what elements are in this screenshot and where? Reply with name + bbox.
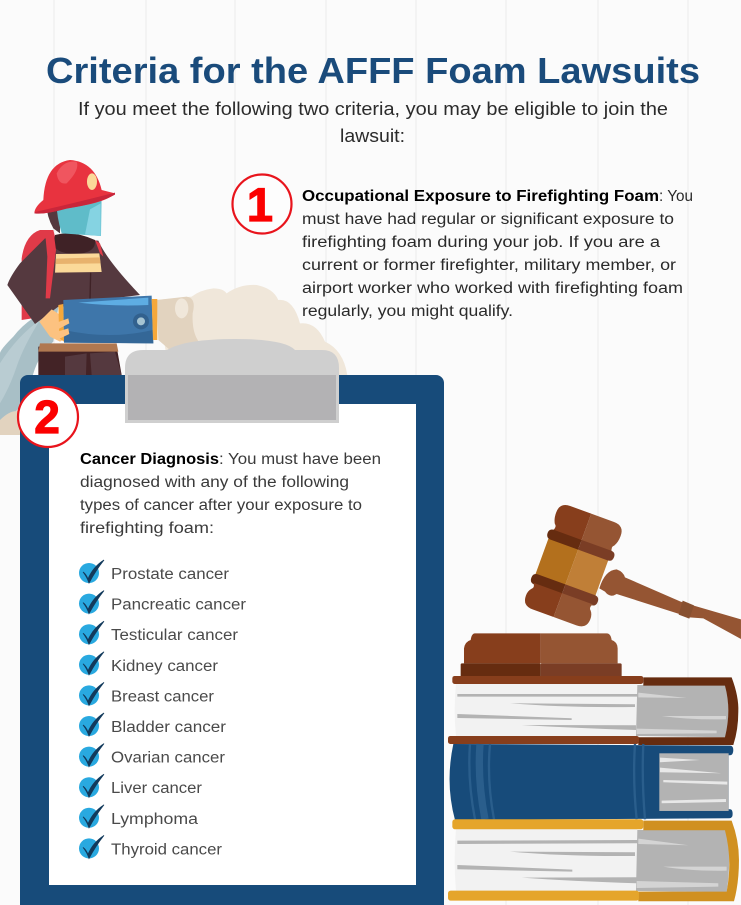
subtitle xyxy=(78,99,668,146)
subtitle: lawsuit: xyxy=(340,126,405,146)
panel: clipboard xyxy=(20,339,444,905)
item: breast cancer xyxy=(79,682,214,705)
hose xyxy=(0,307,58,427)
item: liver cancer xyxy=(79,774,202,797)
item: thyroid cancer xyxy=(79,835,222,858)
text block: cancer diagnosis xyxy=(80,451,381,537)
clipboard clip xyxy=(125,339,339,423)
badge: number 1 xyxy=(232,174,292,234)
jacket reflective band xyxy=(55,253,102,273)
text block: cancer diagnosis: : You must have been xyxy=(219,451,381,468)
text block: cancer diagnosis: types of cancer after your exposure to xyxy=(80,497,362,514)
item: prostate cancer: Prostate cancer xyxy=(111,566,229,583)
text block: cancer diagnosis: diagnosed with any of the following xyxy=(80,474,349,491)
item: lymphoma xyxy=(79,805,198,828)
item: kidney cancer: Kidney cancer xyxy=(111,658,218,675)
helmet and visor xyxy=(47,200,60,233)
item: testicular cancer: Testicular cancer xyxy=(111,627,238,644)
backpack xyxy=(22,230,58,320)
item: breast cancer: Breast cancer xyxy=(111,688,214,705)
text block: occupational exposure: airport worker who worked with firefighting foam xyxy=(302,280,683,297)
text block: cancer diagnosis: firefighting foam: xyxy=(80,520,214,537)
title: Criteria for the AFFF Foam Lawsuits xyxy=(46,50,700,91)
gavel and books illustration xyxy=(448,502,741,901)
firefighter illustration xyxy=(0,160,157,435)
item: ovarian cancer: Ovarian cancer xyxy=(111,750,225,767)
gavel handle xyxy=(599,569,741,639)
book: brown xyxy=(448,676,738,745)
subtitle: If you meet the following two criteria, you may be eligible to join the xyxy=(78,99,668,119)
item: lymphoma: Lymphoma xyxy=(111,811,198,828)
text block: cancer diagnosis: Cancer Diagnosis xyxy=(80,451,219,468)
item: prostate cancer xyxy=(79,560,229,583)
jacket xyxy=(7,238,140,324)
gavel sound block xyxy=(464,633,541,663)
item: kidney cancer xyxy=(79,652,218,675)
text block: occupational exposure: must have had regular or significant exposure to xyxy=(302,211,674,228)
item: ovarian cancer xyxy=(79,744,225,767)
item: testicular cancer xyxy=(79,621,238,644)
text block: occupational exposure: regularly, you might qualify. xyxy=(302,303,513,320)
item: pancreatic cancer xyxy=(79,591,246,614)
text block: occupational exposure xyxy=(302,188,693,320)
foam spray xyxy=(157,285,347,375)
hand xyxy=(39,309,69,342)
text block: occupational exposure: firefighting foam during your job. If you are a xyxy=(302,234,660,251)
badge: number 1: 1 xyxy=(247,178,273,231)
item: bladder cancer: Bladder cancer xyxy=(111,719,226,736)
text block: occupational exposure: current or former firefighter, military member, or xyxy=(302,257,676,274)
badge: number 2 xyxy=(18,387,78,447)
item: thyroid cancer: Thyroid cancer xyxy=(111,841,222,858)
book: blue xyxy=(450,744,733,820)
text block: occupational exposure: : You xyxy=(659,188,693,205)
gavel head xyxy=(521,502,625,629)
badge: number 2: 2 xyxy=(34,391,60,443)
legs xyxy=(38,347,122,375)
item: liver cancer: Liver cancer xyxy=(111,780,202,797)
book: yellow xyxy=(448,819,739,901)
item: pancreatic cancer: Pancreatic cancer xyxy=(111,597,246,614)
nozzle xyxy=(58,304,64,342)
checklist: cancer types xyxy=(79,560,246,858)
text block: occupational exposure: Occupational Exposure to Firefighting Foam xyxy=(302,188,659,205)
item: bladder cancer xyxy=(79,713,226,736)
